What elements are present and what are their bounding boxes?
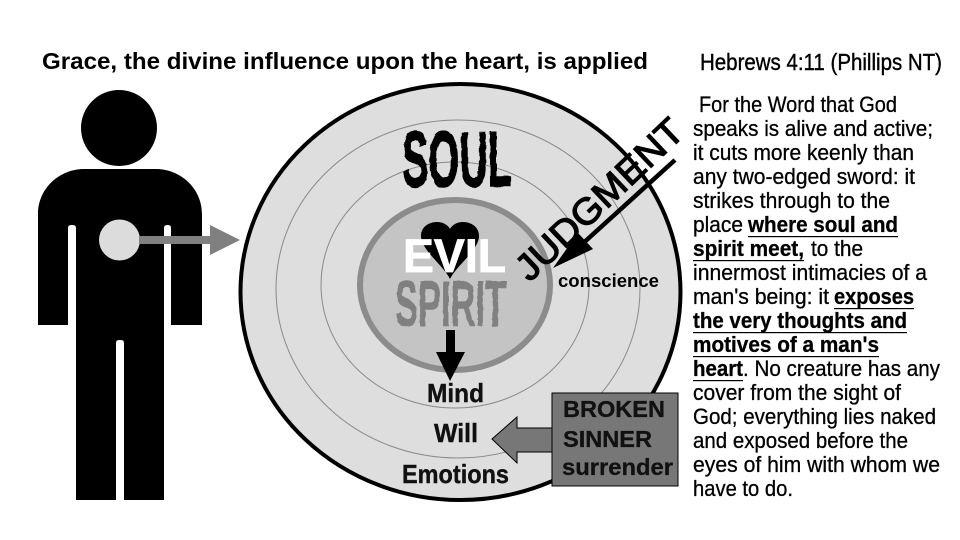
arrow: broken sinner to will <box>492 417 552 463</box>
arrow: spirit down to mind <box>436 330 465 381</box>
scripture text block: . No creature has any <box>743 356 941 381</box>
label: emotions: Emotions <box>402 459 509 489</box>
label: evil: EVIL <box>403 229 506 282</box>
label: spirit: SPIRIT <box>395 267 506 340</box>
scripture text block: have to do. <box>693 476 793 501</box>
scripture text block: motives of a man's <box>693 332 879 357</box>
icon: heart <box>421 222 479 279</box>
scripture text block: cover from the sight of <box>693 380 902 405</box>
scripture text block: spirit meet, <box>693 236 804 261</box>
heart centre circle on figure <box>99 220 140 260</box>
scripture text block: speaks is alive and active; <box>693 116 933 141</box>
callout: broken sinner surrender <box>552 393 678 486</box>
arrow: from heart to diagram <box>139 225 240 255</box>
callout: broken sinner surrender: surrender <box>562 454 673 480</box>
label: conscience: conscience <box>558 271 659 291</box>
scripture text block: to the <box>811 236 863 261</box>
scripture text block: eyes of him with whom we <box>693 452 940 477</box>
scripture text block: place <box>693 212 743 237</box>
scripture text block: heart <box>693 356 743 381</box>
scripture text block: and exposed before the <box>693 428 908 453</box>
scripture text block: where soul and <box>747 212 898 237</box>
scripture text block: God; everything lies naked <box>693 404 936 429</box>
label: mind: Mind <box>427 378 484 408</box>
title: Grace, the divine influence upon the heart, is applied <box>42 48 648 74</box>
label: will: Will <box>434 418 478 448</box>
scripture text block: For the Word that God <box>699 92 897 117</box>
label: judgment: JUDGMENT <box>507 110 692 289</box>
scripture text block: man's being: it <box>693 284 830 309</box>
scripture text block: any two-edged sword: it <box>693 164 916 189</box>
icon: human figure <box>38 90 202 500</box>
scripture text block: exposes <box>834 284 914 309</box>
scripture text block: the very thoughts and <box>693 308 907 333</box>
scripture text block <box>693 92 941 501</box>
label: soul: SOUL <box>402 115 512 203</box>
scripture text block: strikes through to the <box>693 188 890 213</box>
arrow: judgment to conscience <box>553 160 675 268</box>
callout: broken sinner surrender: SINNER <box>563 426 652 452</box>
scripture text block: it cuts more keenly than <box>693 140 914 165</box>
target diagram: soul and spirit circles <box>240 84 680 500</box>
scripture text block: innermost intimacies of a <box>693 260 927 285</box>
callout: broken sinner surrender: BROKEN <box>563 396 665 422</box>
